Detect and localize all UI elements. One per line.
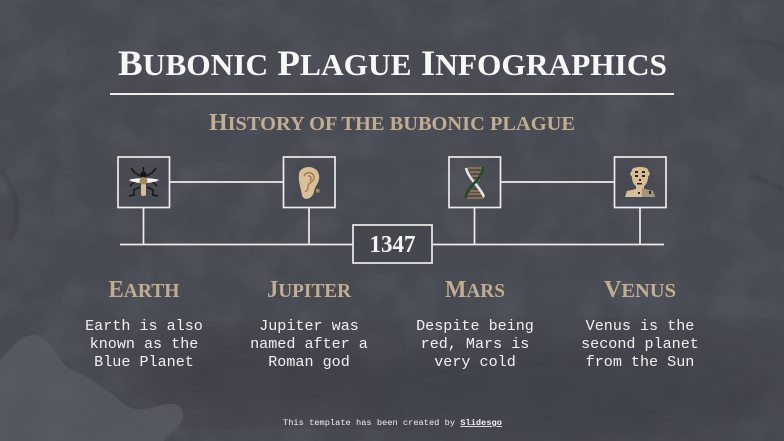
- column: Jupiter: [250, 277, 368, 371]
- column: Jupiter: Roman god: [268, 353, 350, 371]
- column: Mars: Despite being: [416, 317, 534, 335]
- column: Venus: second planet: [581, 335, 699, 353]
- column: Earth: Blue Planet: [94, 353, 194, 371]
- timeline: [118, 157, 666, 263]
- column: Earth: EARTH: [108, 277, 180, 303]
- column: Mars: [416, 277, 534, 371]
- decorative blob bottom left: [0, 335, 183, 441]
- column: Jupiter: JUPITER: [267, 277, 351, 303]
- column: Venus: from the Sun: [586, 353, 694, 371]
- column: Venus: Venus is the: [586, 317, 694, 335]
- column: Earth: Earth is also: [85, 317, 203, 335]
- column: Mars: red, Mars is: [421, 335, 529, 353]
- column: Earth: known as the: [90, 335, 198, 353]
- title: BUBONIC PLAGUE INFOGRAPHICS: [118, 43, 667, 83]
- footer credit: This template has been created by Slidesgo: [283, 418, 502, 428]
- column: Venus: [581, 277, 699, 371]
- column: Mars: very cold: [434, 353, 516, 371]
- column: Jupiter: Jupiter was: [259, 317, 359, 335]
- column: Mars: MARS: [445, 277, 505, 303]
- subtitle: HISTORY OF THE BUBONIC PLAGUE: [209, 110, 575, 136]
- icon box: DNA: [449, 157, 500, 208]
- icon box: ear: [284, 157, 335, 208]
- year box: [353, 225, 432, 263]
- column: Jupiter: named after a: [250, 335, 368, 353]
- column: Venus: VENUS: [604, 277, 676, 303]
- icon box: mosquito: [118, 157, 170, 208]
- year box: 1347: [370, 232, 416, 258]
- column: Earth: [85, 277, 203, 371]
- icon box: infected person: [614, 157, 666, 208]
- title rule: [110, 93, 674, 95]
